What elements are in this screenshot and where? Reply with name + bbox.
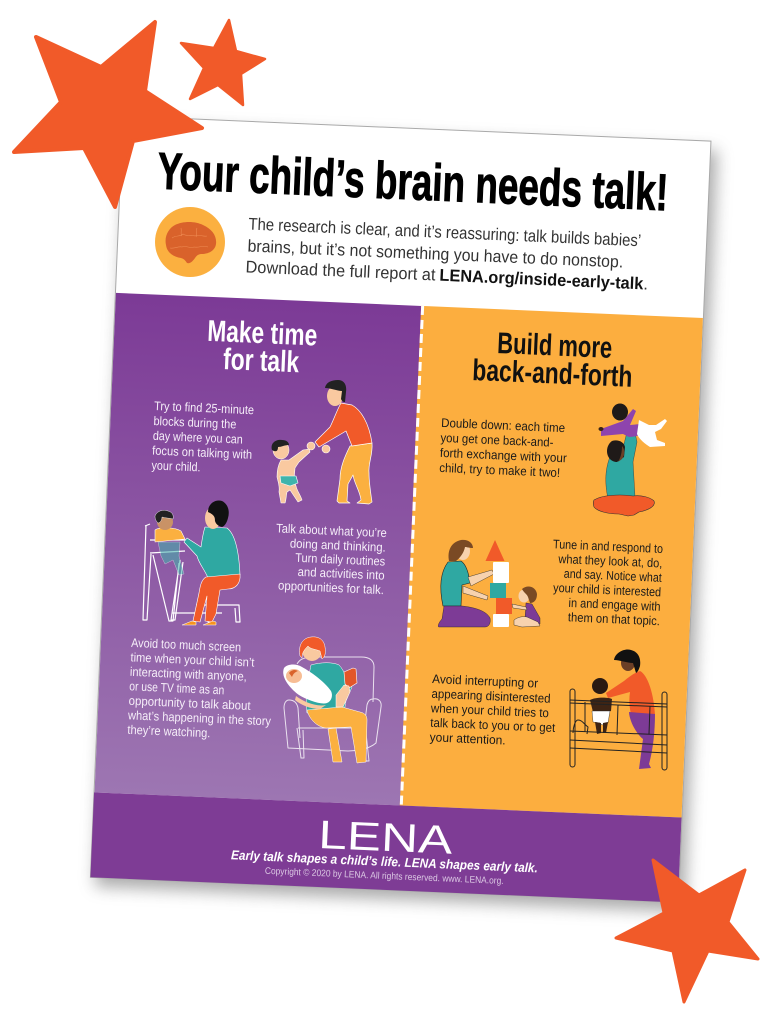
illustration: adult holding toddler's hands: [272, 380, 372, 504]
star: large top-left: [14, 22, 202, 207]
icon: brain in circle: [155, 207, 225, 277]
text: double down: forth exchange with your: [440, 446, 567, 465]
intro text: Download the full report at: [245, 257, 436, 285]
text: avoid too much screen time: interacting with anyone,: [130, 665, 247, 684]
text: double down: child, try to make it two!: [439, 461, 560, 480]
text: tune in and respond: and say. Notice what: [564, 567, 662, 585]
intro text: .: [643, 274, 648, 294]
copyright: Copyright © 2020 by LENA. All rights reserved. www. LENA.org.: [265, 866, 504, 887]
intro text: The research is clear, and it’s reassuring: talk builds babies’: [248, 214, 642, 250]
text: tune in and respond: your child is interested: [553, 581, 661, 599]
panel: make time for talk: [95, 293, 422, 805]
text: tune in and respond: [550, 537, 664, 628]
text: 25-minute blocks: blocks during the: [153, 414, 237, 432]
text: avoid interrupting: your attention.: [429, 730, 506, 748]
intro text: [245, 214, 650, 294]
text: avoid too much screen time: Avoid too much screen: [131, 636, 241, 655]
text: double down: Double down: each time: [441, 416, 565, 435]
illustration: parent and child stacking blocks: [438, 540, 540, 627]
heading: build more back-and-forth: [472, 326, 634, 394]
heading: build more back-and-forth: Build more: [497, 327, 613, 365]
illustration: adult feeding child in high chair: [143, 500, 240, 625]
text: talk about what you are doing: opportunities for talk.: [278, 579, 384, 597]
heading: make time for talk: [205, 315, 318, 380]
text: talk about what you are doing: Talk about what you’re: [276, 521, 387, 540]
text: 25-minute blocks: your child.: [151, 458, 201, 474]
text: double down: you get one back-and-: [440, 431, 554, 450]
heading: build more back-and-forth: back-and-forth: [472, 354, 633, 394]
text: avoid too much screen time: or use TV time as an: [129, 679, 225, 697]
text: talk about what you are doing: and activities into: [297, 565, 385, 583]
text: tune in and respond: what they look at, do,: [557, 552, 663, 570]
text: avoid interrupting: talk back to you or to get: [430, 716, 556, 735]
poster sheet: [90, 116, 717, 912]
star: bottom right: [616, 860, 758, 1002]
text: avoid too much screen time: time when your child isn’t: [130, 650, 255, 670]
text: tune in and respond: Tune in and respond to: [553, 537, 663, 556]
text: avoid too much screen time: what’s happening in the story: [127, 708, 272, 728]
text: avoid interrupting: appearing disinterested: [431, 687, 551, 706]
text: avoid too much screen time: they’re watching.: [127, 723, 211, 740]
heading: make time for talk: Make time: [207, 315, 318, 352]
text: 25-minute blocks: Try to find 25-minute: [154, 399, 254, 417]
text: talk about what you are doing: doing and thinking.: [290, 537, 386, 555]
illustration: adult reading to baby in armchair: [283, 637, 381, 763]
text: tune in and respond: them on that topic.: [568, 610, 660, 628]
text: avoid interrupting: [429, 672, 558, 750]
text: 25-minute blocks: focus on talking with: [152, 444, 252, 462]
text: avoid interrupting: when your child tries to: [430, 701, 549, 720]
text: double down: [439, 416, 568, 480]
panel: build more back-and-forth: [400, 306, 703, 818]
intro text: LENA.org/inside-early-talk: [439, 266, 644, 293]
illustration: parent lifting baby in the air: [593, 404, 667, 516]
text: tune in and respond: in and engage with: [568, 596, 661, 614]
text: avoid too much screen time: opportunity to talk about: [128, 694, 251, 713]
intro text: brains, but it’s not something you have to do nonstop.: [247, 236, 624, 272]
text: talk about what you are doing: Turn daily routines: [295, 551, 385, 569]
LENA logo: LENA: [318, 813, 454, 863]
text: avoid interrupting: Avoid interrupting or: [432, 672, 538, 691]
heading: make time for talk: for talk: [222, 343, 300, 379]
star: small top: [181, 20, 265, 105]
illustration: parent and baby in crib: [570, 650, 667, 770]
text: avoid too much screen time: [126, 636, 275, 743]
footer band: [90, 792, 682, 902]
text: 25-minute blocks: day where you can: [153, 429, 243, 447]
text: talk about what you are doing: [273, 521, 387, 597]
text: 25-minute blocks: [151, 399, 254, 477]
tagline: Early talk shapes a child’s life. LENA shapes early talk.: [231, 847, 538, 875]
